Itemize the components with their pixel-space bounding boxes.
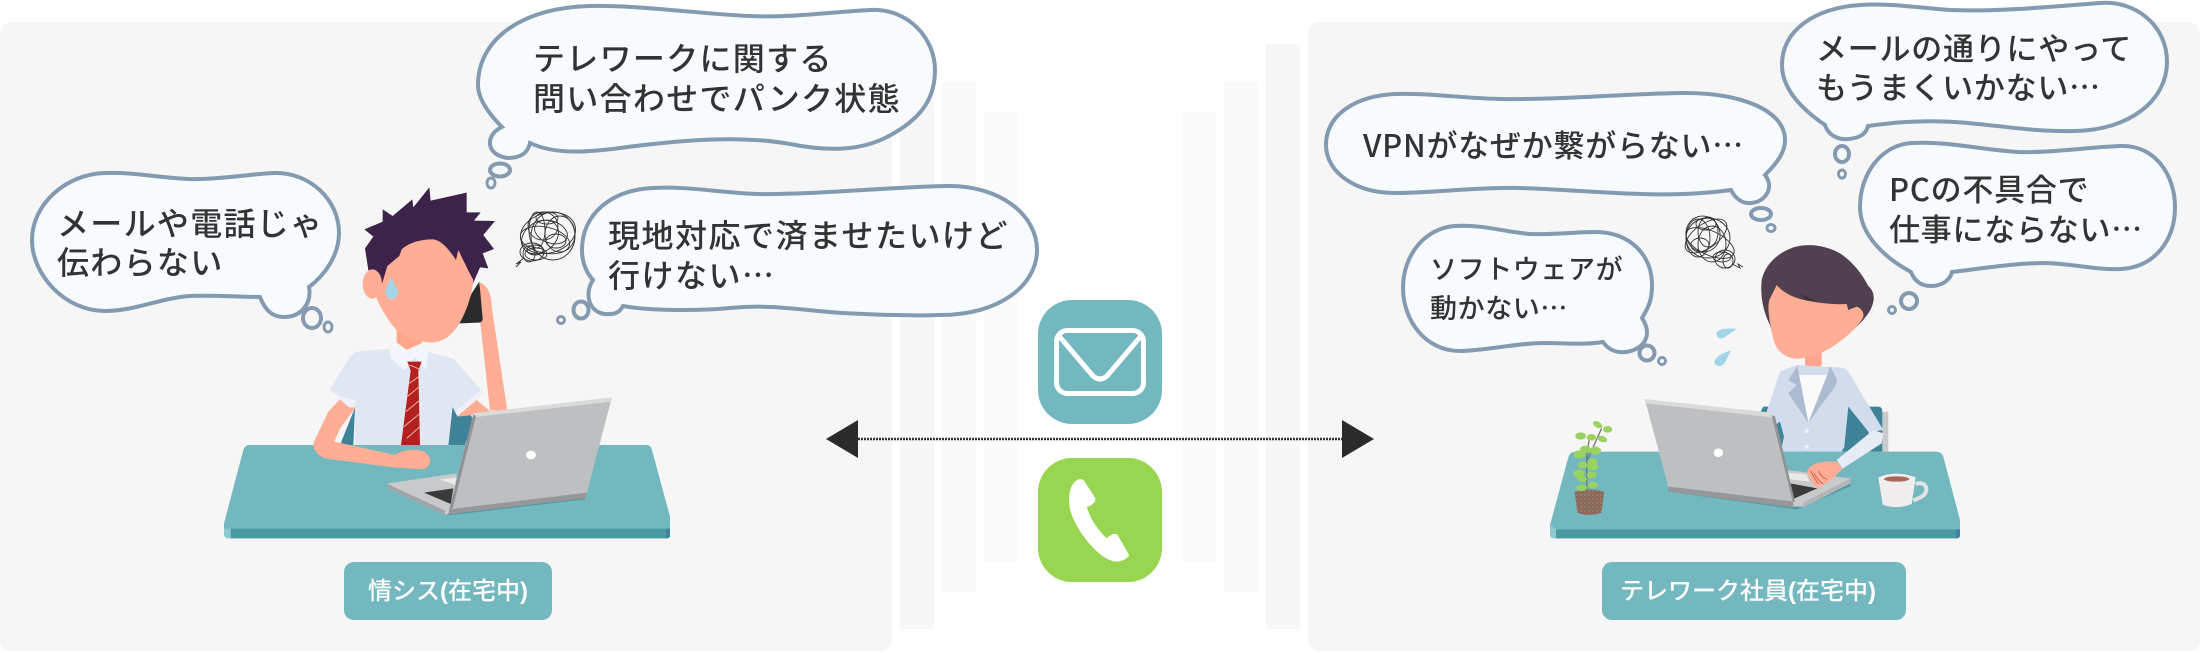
- speech bubble: PC trouble: PCの不具合で: [1889, 165, 2089, 210]
- speech bubble: mail and phone: メールや電話じゃ: [57, 199, 323, 245]
- sleeve: [1837, 430, 1883, 469]
- desk: [224, 445, 670, 538]
- label: IT staff: 情シス(在宅中): [368, 571, 528, 606]
- neck: [397, 328, 422, 350]
- plant: [1573, 420, 1612, 515]
- face: [375, 239, 473, 342]
- speech bubble: VPN: VPNがなぜか繋がらない…: [1362, 121, 1744, 166]
- right arm: [457, 283, 507, 417]
- chair back: [1760, 407, 1882, 452]
- background bars: [900, 44, 1300, 629]
- speech bubble: mail instructions: [1782, 3, 2167, 178]
- speech bubble: PC trouble: 仕事にならない…: [1889, 205, 2143, 250]
- label: IT staff: [344, 562, 552, 620]
- speech bubble: inquiries: テレワークに関する: [533, 34, 833, 80]
- icon: mail: [1038, 300, 1162, 424]
- left arm: [313, 397, 430, 469]
- label: teleworker: [1602, 562, 1906, 620]
- chair: [340, 406, 474, 445]
- blouse: [1797, 375, 1827, 423]
- speech bubble: on-site: [558, 186, 1037, 324]
- shirt: [329, 348, 484, 445]
- speech bubble: software: 動かない…: [1430, 287, 1568, 326]
- sweat drop: [385, 276, 398, 299]
- speech bubble: inquiries: [478, 6, 935, 188]
- speech bubble: VPN: [1326, 93, 1785, 232]
- icon: scribble right: [1679, 212, 1743, 268]
- speech bubble: inquiries: 問い合わせでパンク状態: [533, 74, 901, 120]
- collar: [389, 342, 428, 371]
- illustration: teleworker at desk: [1550, 245, 1960, 538]
- buttons: [1805, 429, 1809, 449]
- face: [1768, 285, 1863, 359]
- phone: [459, 282, 483, 323]
- speech bubble: on-site: 行けない…: [608, 251, 776, 297]
- hair: [364, 187, 495, 287]
- coffee cup: [1878, 474, 1926, 507]
- chair: [1882, 412, 1888, 452]
- speech bubble: software: ソフトウェアが: [1430, 248, 1623, 287]
- speech bubble: PC trouble: [1860, 143, 2175, 314]
- desk: [1550, 452, 1960, 538]
- necktie: [401, 362, 422, 445]
- sleeve cuffs: [329, 389, 484, 416]
- speech bubble: on-site: 現地対応で済ませたいけど: [608, 211, 1009, 257]
- jacket: [1767, 365, 1883, 452]
- speech bubble: mail and phone: [32, 173, 339, 332]
- illustration: IT staff at desk: [224, 187, 670, 538]
- neck: [1805, 352, 1822, 371]
- lapels: [1788, 366, 1837, 423]
- laptop: [388, 397, 612, 515]
- double-headed arrow: [826, 420, 1374, 458]
- laptop: [1644, 399, 1851, 509]
- label: teleworker: テレワーク社員(在宅中): [1620, 571, 1876, 606]
- speech bubble: software: [1403, 226, 1666, 364]
- speech bubble: mail instructions: もうまくいかない…: [1816, 63, 2101, 108]
- hand: [1807, 461, 1843, 488]
- icon: phone: [1038, 458, 1162, 582]
- ear: [363, 269, 382, 299]
- panel: left: [0, 22, 892, 651]
- sweat drops: [1714, 329, 1737, 366]
- speech bubble: mail instructions: メールの通りにやって: [1816, 24, 2132, 69]
- icon: scribble left: [515, 206, 580, 267]
- speech bubble: mail and phone: 伝わらない: [57, 238, 224, 284]
- hair: [1761, 245, 1874, 337]
- panel: right: [1308, 22, 2200, 651]
